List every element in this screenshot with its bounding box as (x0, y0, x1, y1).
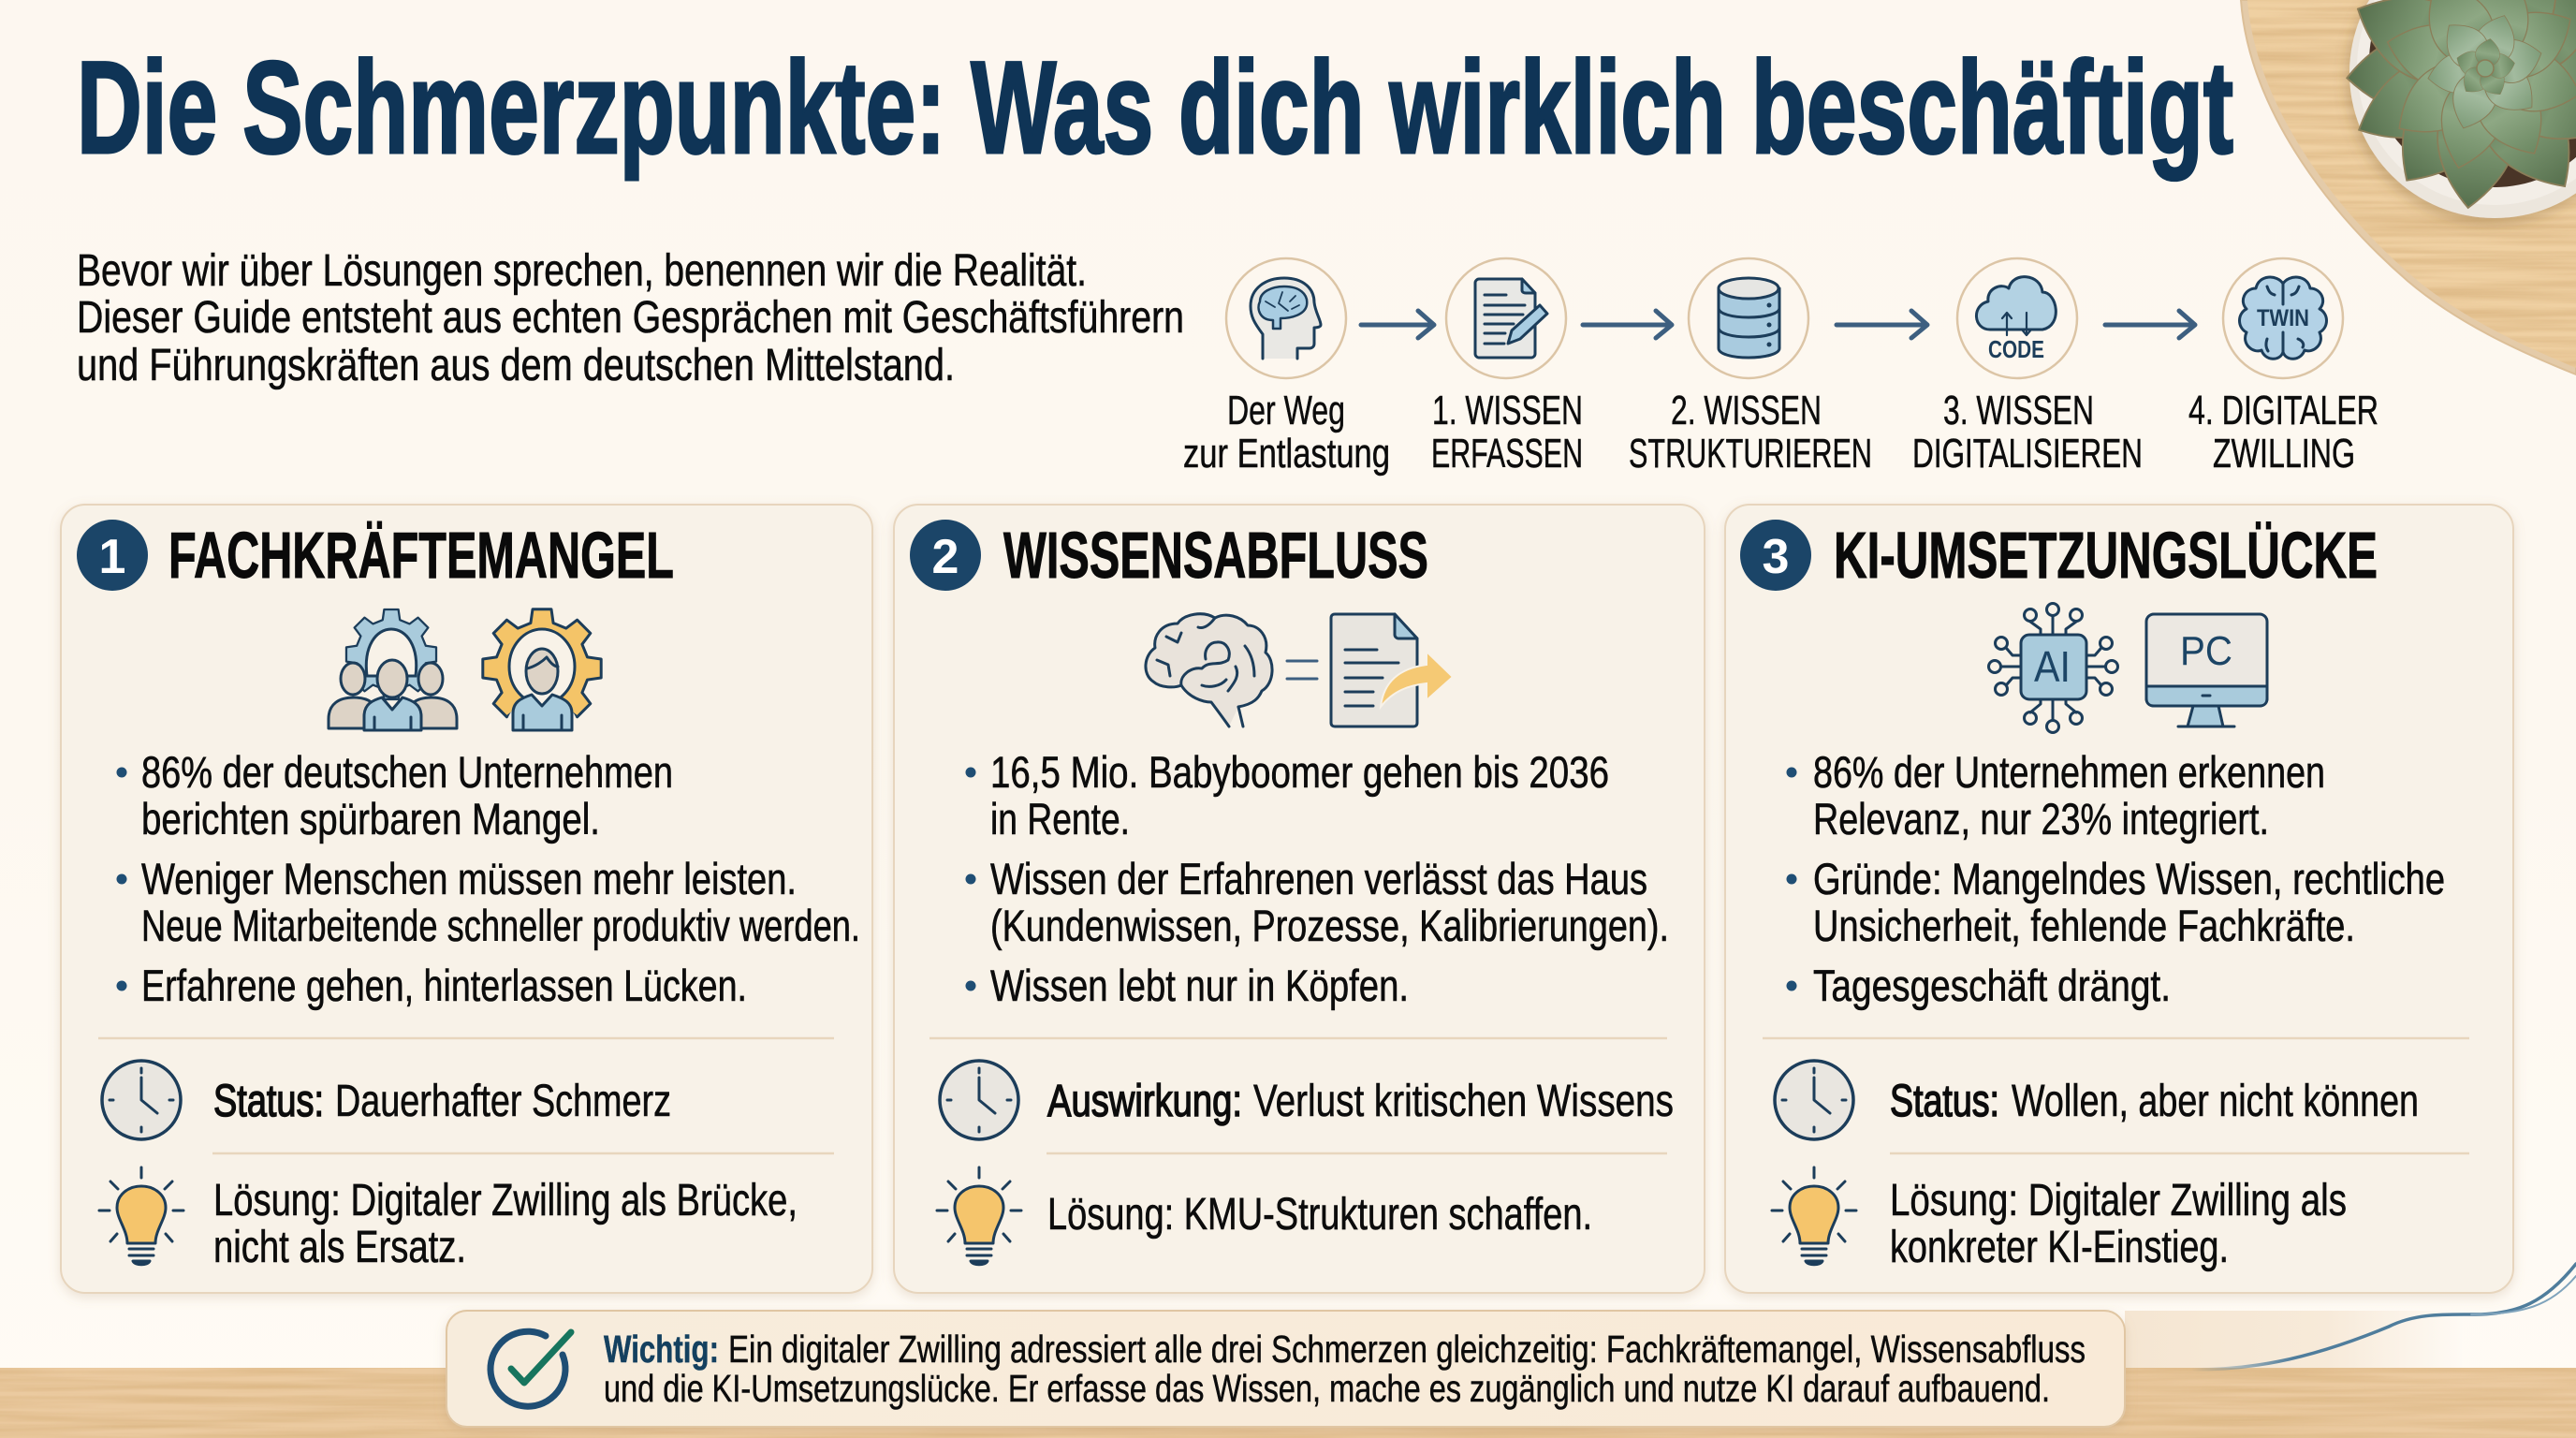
solution text (1890, 1176, 2347, 1272)
bullet list: Erfahrene gehen, hinterlassen Lücken. (141, 961, 747, 1010)
callout text: Wichtig: (604, 1328, 719, 1371)
flow labels (1183, 388, 2378, 477)
status text: Dauerhafter Schmerz (335, 1077, 671, 1126)
panel: Wissensabfluss (894, 505, 1705, 1293)
arrow (1837, 311, 1927, 338)
cable (2191, 1264, 2576, 1370)
callout: Wichtig (446, 1311, 2125, 1427)
icon: twin brain: TWIN (2257, 305, 2309, 331)
icon: light bulb (1772, 1167, 1856, 1265)
solution text: konkreter KI-Einstieg. (1890, 1223, 2229, 1272)
bullet list: (Kundenwissen, Prozesse, Kalibrierungen). (990, 901, 1669, 950)
icon: cloud code (1957, 258, 2077, 378)
wood table corner with plant (2241, 0, 2576, 374)
bullet list: Gründe: Mangelndes Wissen, rechtliche (1813, 854, 2445, 903)
number badge 3 (1740, 520, 1811, 591)
bullet list (1786, 747, 2445, 1010)
bullet list: Relevanz, nur 23% integriert. (1813, 794, 2269, 844)
bullet list: Wissen der Erfahrenen verlässt das Haus (990, 854, 1647, 903)
icon: AI chip (1988, 603, 2117, 732)
bullet list: in Rente. (990, 794, 1130, 844)
solution text: Lösung: Digitaler Zwilling als (1890, 1176, 2347, 1225)
number badge 1: 1 (99, 530, 125, 584)
flow labels: 4. DIGITALER (2188, 388, 2378, 433)
arrow (1361, 311, 1434, 338)
bullet list (116, 747, 860, 1010)
bullet list: 86% der Unternehmen erkennen (1813, 747, 2325, 797)
icon: AI chip: AI (2034, 642, 2071, 691)
icon: check mark (490, 1331, 571, 1406)
icon: monitor PC (2146, 614, 2267, 726)
bullet list: Wissen lebt nur in Köpfen. (990, 961, 1409, 1010)
heading: WISSENSABFLUSS (1003, 519, 1428, 592)
status text: Status: (213, 1077, 324, 1126)
intro text: Dieser Guide entsteht aus echten Gesprächen mit Geschäftsführern (77, 293, 1184, 343)
bullet list: Weniger Menschen müssen mehr leisten. (141, 854, 797, 903)
status text: Wollen, aber nicht können (2012, 1077, 2419, 1126)
icon: monitor PC: PC (2180, 628, 2232, 674)
status text (213, 1077, 671, 1126)
callout text (604, 1328, 2086, 1410)
callout text: und die KI-Umsetzungslücke. Er erfasse das Wissen, mache es zugänglich und nutze KI darauf aufbauend. (604, 1367, 2050, 1410)
bullet list: Unsicherheit, fehlende Fachkräfte. (1813, 901, 2355, 950)
number badge 1 (77, 520, 148, 591)
icon: clock (102, 1061, 181, 1139)
solution text: Lösung: KMU-Strukturen schaffen. (1047, 1190, 1592, 1240)
flow labels: zur Entlastung (1183, 431, 1390, 477)
flow labels: ERFASSEN (1431, 431, 1583, 477)
intro text (77, 246, 1184, 390)
icon: document with pencil (1446, 258, 1566, 378)
impact text: Auswirkung: (1047, 1077, 1242, 1126)
wood floor strip (0, 1311, 2576, 1438)
status text: Status: (1890, 1077, 1999, 1126)
bullet list: Tagesgeschäft drängt. (1813, 961, 2171, 1010)
solution text (213, 1176, 798, 1272)
flow labels: 3. WISSEN (1943, 388, 2094, 433)
panel: Fachkräftemangel (61, 505, 872, 1293)
flow labels: DIGITALISIEREN (1912, 431, 2143, 477)
icon: plant pot (2349, 0, 2576, 218)
arrow (2105, 311, 2195, 338)
flow labels: 2. WISSEN (1671, 388, 1822, 433)
intro text: Bevor wir über Lösungen sprechen, benennen wir die Realität. (77, 246, 1087, 296)
icon: light bulb (937, 1167, 1021, 1265)
icon: clock (1775, 1061, 1853, 1139)
intro text: und Führungskräften aus dem deutschen Mittelstand. (77, 341, 955, 390)
flow labels: Der Weg (1227, 388, 1345, 433)
number badge 2 (910, 520, 981, 591)
bullet list: Neue Mitarbeitende schneller produktiv werden. (141, 901, 860, 950)
icon: brain equals document (1146, 614, 1453, 726)
number badge 3: 3 (1763, 530, 1789, 584)
arrow (1583, 311, 1672, 338)
flow labels: ZWILLING (2213, 431, 2355, 477)
impact text: Verlust kritischen Wissens (1253, 1077, 1674, 1126)
bullet list: berichten spürbaren Mangel. (141, 794, 600, 844)
icon: team with gears (329, 609, 457, 730)
status text (1890, 1077, 2419, 1126)
solution text: Lösung: Digitaler Zwilling als Brücke, (213, 1176, 798, 1225)
bullet list (966, 747, 1669, 1010)
number badge 2: 2 (932, 530, 959, 584)
icon: twin brain (2223, 258, 2343, 378)
bullet list: 16,5 Mio. Babyboomer gehen bis 2036 (990, 747, 1609, 797)
heading: FACHKRÄFTEMANGEL (168, 519, 674, 592)
icon: light bulb (99, 1167, 183, 1265)
flow labels: 1. WISSEN (1432, 388, 1583, 433)
solution text: nicht als Ersatz. (213, 1223, 466, 1272)
panel: KI-Umsetzungslücke (1725, 505, 2513, 1293)
icon: head with brain (1226, 258, 1346, 378)
bullet list: 86% der deutschen Unternehmen (141, 747, 673, 797)
flow labels: STRUKTURIEREN (1629, 431, 1872, 477)
icon: person in gear (483, 609, 601, 731)
process flow (1183, 258, 2378, 477)
icon: clock (940, 1061, 1018, 1139)
impact text (1047, 1077, 1674, 1126)
icon: succulent (2341, 0, 2576, 213)
callout text: Ein digitaler Zwilling adressiert alle drei Schmerzen gleichzeitig: Fachkräftemangel, Wissensabfluss (728, 1328, 2086, 1371)
icon: cloud code: CODE (1988, 335, 2044, 363)
icon: database (1689, 258, 1808, 378)
